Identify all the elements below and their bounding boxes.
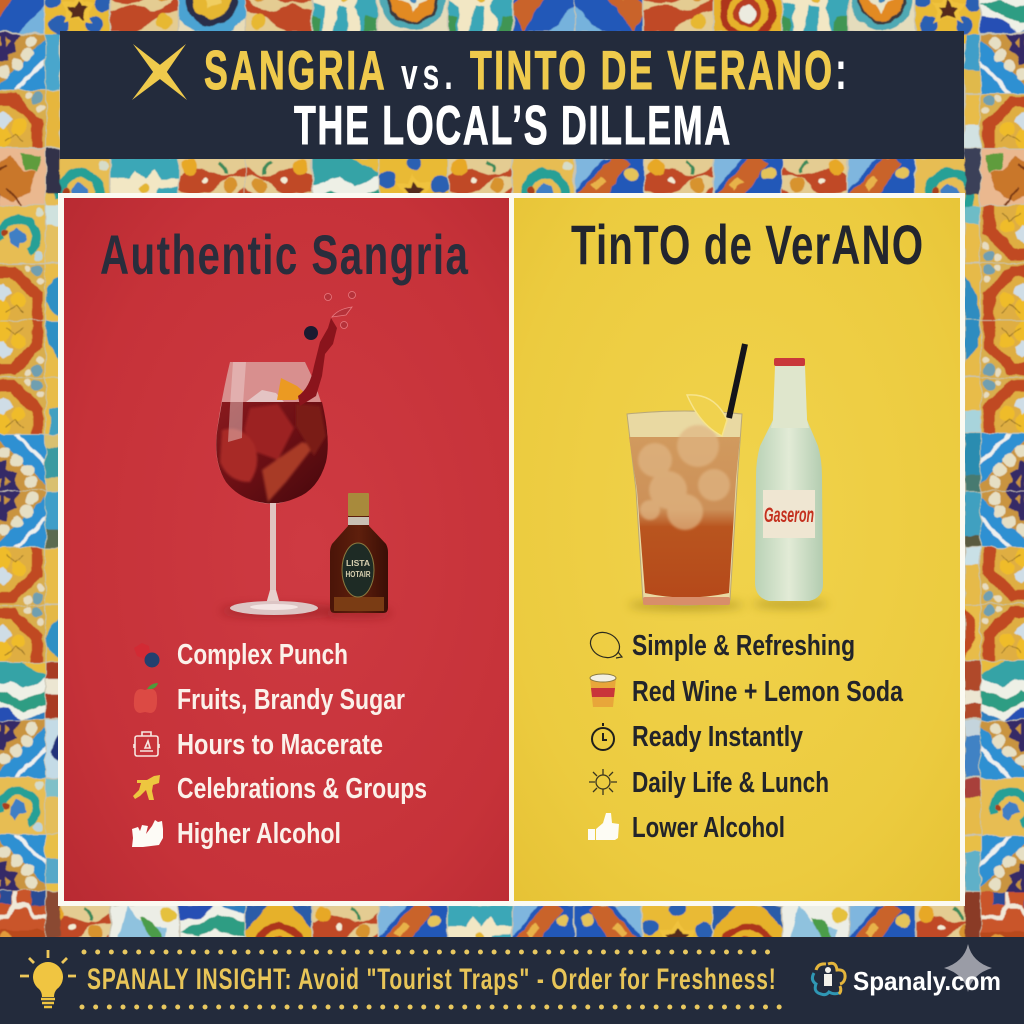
top row xyxy=(0,0,45,32)
illustration: sangria glass xyxy=(216,292,356,616)
icon: celebration figure xyxy=(133,775,160,800)
icon: crossed swords xyxy=(132,44,187,100)
illustration: brandy bottle: LISTA xyxy=(346,559,370,568)
icon: berries xyxy=(134,643,160,668)
list: tinto traits: Daily Life & Lunch xyxy=(632,767,829,799)
right column xyxy=(979,34,1024,95)
list: sangria traits: Celebrations & Groups xyxy=(177,773,427,805)
icon: thumbs up xyxy=(588,813,619,840)
title line 2: THE LOCAL’S DILLEMA xyxy=(294,94,730,156)
icon: light bulb xyxy=(20,950,76,1007)
panel: authentic sangria xyxy=(64,198,509,901)
illustration: brandy bottle xyxy=(324,493,392,617)
list: tinto traits xyxy=(586,628,904,844)
title line 1 xyxy=(204,39,847,101)
brand name: Spanaly.com xyxy=(853,966,1001,996)
list: sangria traits: Complex Punch xyxy=(177,639,348,671)
list: tinto traits: Red Wine + Lemon Soda xyxy=(632,676,904,708)
icon: layered cup xyxy=(590,674,616,707)
icon: spanaly logo xyxy=(812,963,845,995)
illustration: soda bottle: Gaseron xyxy=(764,504,814,527)
list: tinto traits: Lower Alcohol xyxy=(632,812,785,844)
list: sangria traits: Fruits, Brandy Sugar xyxy=(177,684,405,716)
list: sangria traits: Higher Alcohol xyxy=(177,818,341,850)
icon: maceration timer xyxy=(134,732,159,756)
insight text: SPANALY INSIGHT: Avoid "Tourist Traps" - Order for Freshness! xyxy=(87,964,776,996)
title line 1: SANGRIA xyxy=(204,39,385,101)
footer insight bar xyxy=(0,937,1024,1024)
right narrow column xyxy=(965,34,980,92)
icon: lemon xyxy=(586,628,624,662)
illustration: brandy bottle: HOTAIR xyxy=(346,570,371,579)
title line 1: : xyxy=(835,39,847,101)
icon: apple xyxy=(134,683,158,713)
icon: stopwatch xyxy=(592,723,614,750)
title banner xyxy=(60,31,964,159)
list: sangria traits: Hours to Macerate xyxy=(177,729,383,761)
heading: authentic sangria: Authentic Sangria xyxy=(100,225,469,287)
list: tinto traits: Simple & Refreshing xyxy=(632,630,855,662)
icon: watermark star xyxy=(944,944,992,992)
illustration: soda bottle xyxy=(752,358,828,608)
list: sangria traits xyxy=(132,639,427,850)
bottom row xyxy=(43,905,112,973)
panel: tinto de verano xyxy=(514,198,960,901)
comparison panel frame xyxy=(58,193,965,906)
second row xyxy=(46,158,110,223)
illustration: tinto glass xyxy=(627,344,745,610)
heading: tinto de verano: TinTO de VerANO xyxy=(571,215,923,277)
title line 1: TINTO DE VERANO xyxy=(470,39,832,101)
icon: hand xyxy=(132,820,163,847)
list: tinto traits: Ready Instantly xyxy=(632,721,803,753)
left narrow column xyxy=(46,34,60,90)
title line 1: vs. xyxy=(401,49,453,98)
icon: sun xyxy=(589,769,617,795)
left column xyxy=(0,34,47,92)
